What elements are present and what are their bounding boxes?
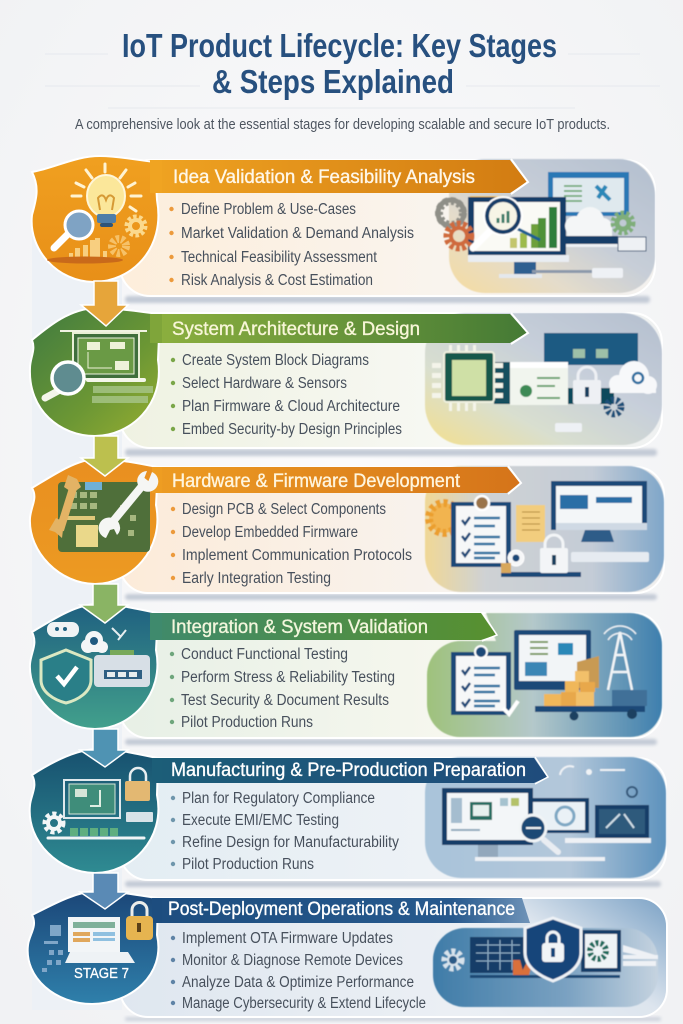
arrow: stage 1 to 2 bbox=[81, 281, 128, 326]
stage 4 bullet list bbox=[170, 646, 395, 731]
stage 1 bullet list bbox=[169, 201, 414, 289]
stage 4 banner bbox=[140, 612, 497, 641]
stage 3 badge with circuit board and wrenches bbox=[30, 459, 162, 584]
stage 5 bullet list: Pilot Production Runs bbox=[182, 856, 314, 873]
stage 2 card body bbox=[120, 313, 662, 448]
stage 1 bullet list: Market Validation & Demand Analysis bbox=[181, 225, 414, 242]
arrow: stage 5 to 6 bbox=[80, 873, 128, 909]
stage 1 bullet list: Technical Feasibility Assessment bbox=[181, 249, 378, 266]
stage 6 top right tint bbox=[500, 899, 666, 1016]
subtitle: A comprehensive look at the essential stages for developing scalable and secure IoT products. bbox=[75, 117, 610, 133]
stage 2 banner: System Architecture & Design bbox=[172, 319, 420, 340]
stage 5 illustration bbox=[425, 757, 666, 878]
stage 5 badge with laptop icon bbox=[30, 749, 162, 873]
stage 2 bullet list bbox=[171, 352, 402, 438]
stage 3 bullet list: Design PCB & Select Components bbox=[182, 501, 386, 518]
stage 5 bullet list: Refine Design for Manufacturability bbox=[182, 834, 399, 851]
stage 4 bullet list: Perform Stress & Reliability Testing bbox=[181, 669, 395, 686]
stage 6 illustration bbox=[433, 918, 658, 1007]
stage 6 badge with laptop, lock and stage label bbox=[28, 891, 162, 1004]
arrow: stage 3 to 4 bbox=[80, 584, 128, 623]
stage 5 bullet list: Plan for Regulatory Compliance bbox=[182, 790, 375, 807]
stage 6 bullet list: Monitor & Diagnose Remote Devices bbox=[182, 952, 403, 969]
stage 4 illustration bbox=[427, 613, 662, 737]
stage 4 card body bbox=[120, 613, 662, 738]
stage 3 banner: Hardware & Firmware Development bbox=[172, 471, 461, 492]
stage 6 banner: Post-Deployment Operations & Maintenance bbox=[168, 899, 515, 920]
stage 2 bullet list: Select Hardware & Sensors bbox=[182, 375, 347, 392]
stage 5 bullet list: Execute EMI/EMC Testing bbox=[182, 812, 339, 829]
stage 3 banner bbox=[140, 466, 521, 494]
stage 3 bullet list: Early Integration Testing bbox=[182, 570, 331, 587]
stage 3 bullet list: Implement Communication Protocols bbox=[182, 547, 412, 564]
stage 4 bullet list: Pilot Production Runs bbox=[181, 714, 313, 731]
stage 6 bullet list bbox=[171, 930, 426, 1012]
title: & Steps Explained bbox=[212, 63, 454, 100]
arrow: stage 2 to 3 bbox=[81, 436, 128, 476]
stage 2 bullet list: Plan Firmware & Cloud Architecture bbox=[182, 398, 400, 415]
stage 1 banner: Idea Validation & Feasibility Analysis bbox=[173, 167, 475, 188]
title bbox=[122, 27, 557, 100]
stage 6 bullet list: Manage Cybersecurity & Extend Lifecycle bbox=[182, 995, 426, 1012]
stage 1 illustration bbox=[438, 159, 655, 293]
stage 6 bullet list: Analyze Data & Optimize Performance bbox=[182, 974, 414, 991]
stage label: STAGE 7 bbox=[74, 965, 129, 982]
title: IoT Product Lifecycle: Key Stages bbox=[122, 27, 557, 64]
panel: stage 3 hardware and firmware bbox=[30, 459, 664, 600]
stage 2 bullet list: Embed Security-by Design Principles bbox=[182, 421, 402, 438]
stage 1 banner bbox=[140, 159, 528, 194]
stage 4 banner: Integration & System Validation bbox=[171, 617, 428, 638]
stage 5 banner: Manufacturing & Pre-Production Preparation bbox=[171, 760, 526, 781]
panel: stage 6 post-deployment operations bbox=[28, 891, 667, 1021]
panel: stage 1 idea validation bbox=[32, 156, 655, 303]
stage 4 badge with shield icon bbox=[30, 604, 162, 729]
stage 3 bullet list bbox=[171, 501, 412, 587]
stage 5 bullet list bbox=[171, 790, 399, 873]
stage 6 bullet list: Implement OTA Firmware Updates bbox=[182, 930, 393, 947]
stage 6 card body bbox=[120, 898, 667, 1017]
panel: stage 5 manufacturing bbox=[30, 749, 666, 887]
stage 2 bullet list: Create System Block Diagrams bbox=[182, 352, 369, 369]
stage 3 illustration bbox=[425, 466, 664, 592]
stage 4 bullet list: Conduct Functional Testing bbox=[181, 646, 348, 663]
stage 3 card body bbox=[120, 467, 664, 593]
stage 1 card body bbox=[120, 160, 655, 296]
panel: stage 4 integration and validation bbox=[30, 604, 662, 745]
stage 3 bullet list: Develop Embedded Firmware bbox=[182, 524, 358, 541]
stage 2 illustration bbox=[425, 313, 662, 445]
stage 1 bullet list: Define Problem & Use-Cases bbox=[181, 201, 356, 218]
panel: stage 2 system architecture bbox=[30, 308, 662, 456]
stage 2 badge with diagram icon bbox=[30, 308, 162, 436]
stage 5 card body bbox=[120, 758, 666, 880]
stage 4 bullet list: Test Security & Document Results bbox=[181, 692, 389, 709]
arrow: stage 4 to 5 bbox=[80, 729, 128, 767]
stage 1 bullet list: Risk Analysis & Cost Estimation bbox=[181, 272, 373, 289]
stage 1 badge with lightbulb icon bbox=[32, 156, 162, 282]
stage 2 banner bbox=[140, 313, 528, 344]
